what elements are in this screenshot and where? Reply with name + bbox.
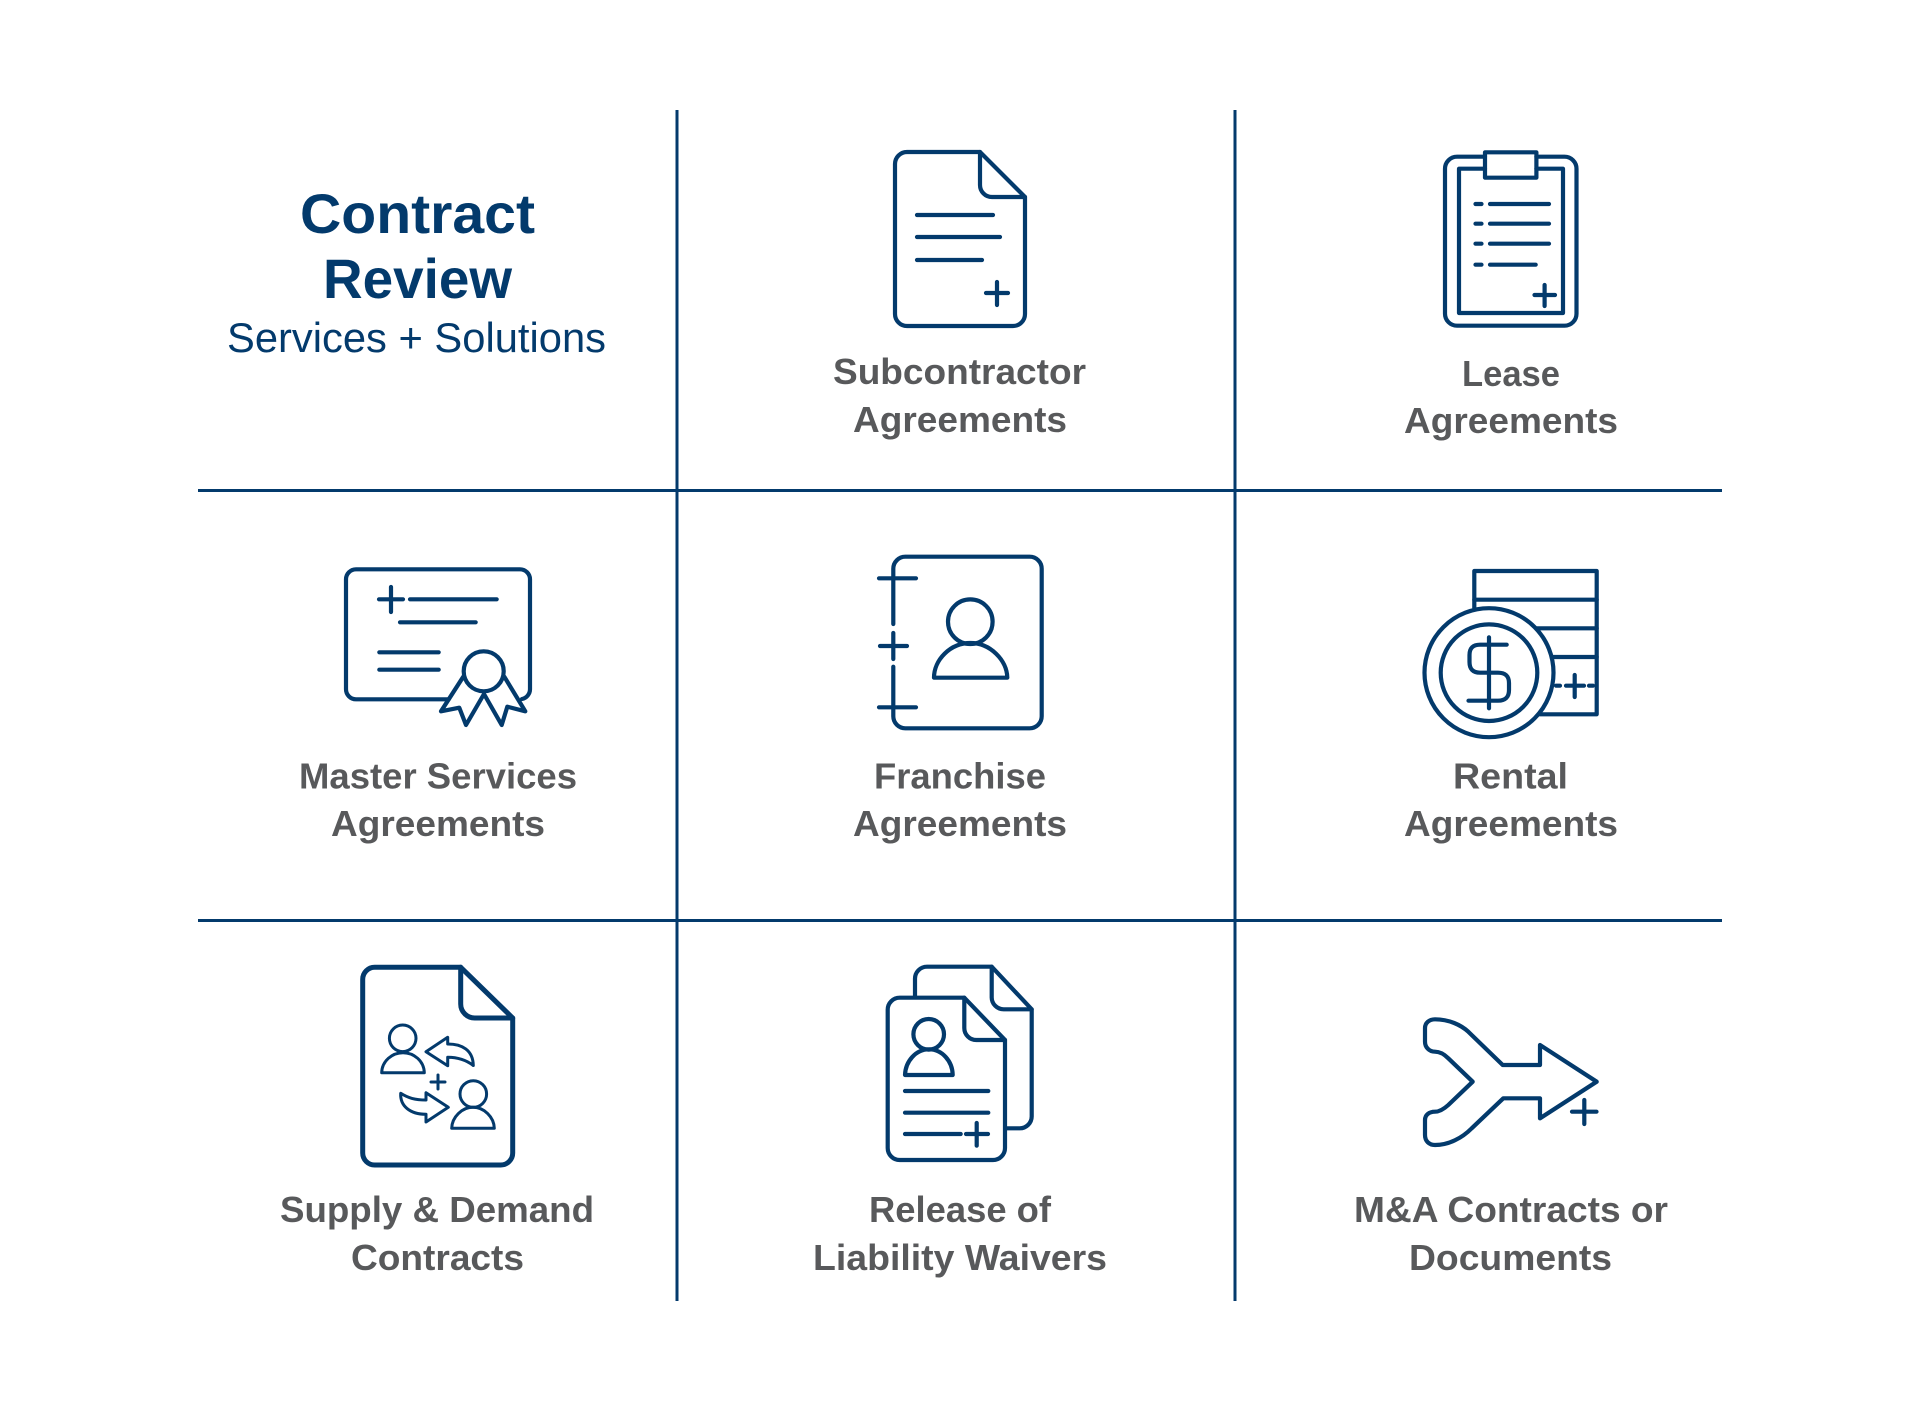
label: Agreements [331, 803, 545, 844]
label: Franchise [874, 756, 1046, 796]
grid lines [198, 110, 1722, 1301]
label: Master Services [299, 756, 577, 796]
label: Rental [1453, 756, 1568, 796]
label: Lease [1462, 353, 1560, 394]
label: Release of [869, 1189, 1052, 1230]
label [299, 756, 577, 844]
icon: certificate with ribbon [346, 569, 530, 725]
label: M&A Contracts or [1354, 1189, 1668, 1230]
icon: two documents with person [888, 967, 1032, 1160]
label: Agreements [1404, 400, 1618, 441]
panel: release of liability waivers [813, 967, 1107, 1278]
panel: franchise agreements [853, 557, 1067, 844]
label: Agreements [853, 803, 1067, 844]
icon: document with plus [895, 152, 1025, 326]
heading: Review [323, 247, 512, 310]
panel: master services agreements [299, 569, 577, 844]
label: Supply & Demand [280, 1189, 594, 1230]
label: Agreements [853, 399, 1067, 440]
panel: supply and demand contracts [280, 967, 594, 1278]
label [1404, 756, 1618, 844]
label [1404, 353, 1618, 441]
label: Liability Waivers [813, 1237, 1107, 1278]
label: Subcontractor [833, 351, 1086, 392]
icon: coin and ledger [1424, 571, 1597, 737]
icon: document with exchanging people [363, 967, 513, 1165]
label [1354, 1189, 1668, 1278]
panel: rental agreements [1404, 571, 1618, 844]
subheading: Services + Solutions [227, 314, 606, 361]
panel: subcontractor agreements [833, 152, 1086, 440]
heading: Contract [300, 182, 535, 245]
label [280, 1189, 594, 1278]
label: Documents [1409, 1237, 1612, 1278]
label: Contracts [351, 1237, 524, 1278]
icon: clipboard [1445, 152, 1576, 326]
panel: M&A contracts or documents [1354, 1019, 1668, 1278]
panel: title [227, 182, 606, 361]
heading [300, 182, 535, 310]
label [833, 351, 1086, 440]
label [853, 756, 1067, 844]
icon: merging arrow [1425, 1019, 1597, 1145]
label [813, 1189, 1107, 1278]
icon: address book [879, 557, 1042, 728]
label: Agreements [1404, 803, 1618, 844]
panel: lease agreements [1404, 152, 1618, 441]
